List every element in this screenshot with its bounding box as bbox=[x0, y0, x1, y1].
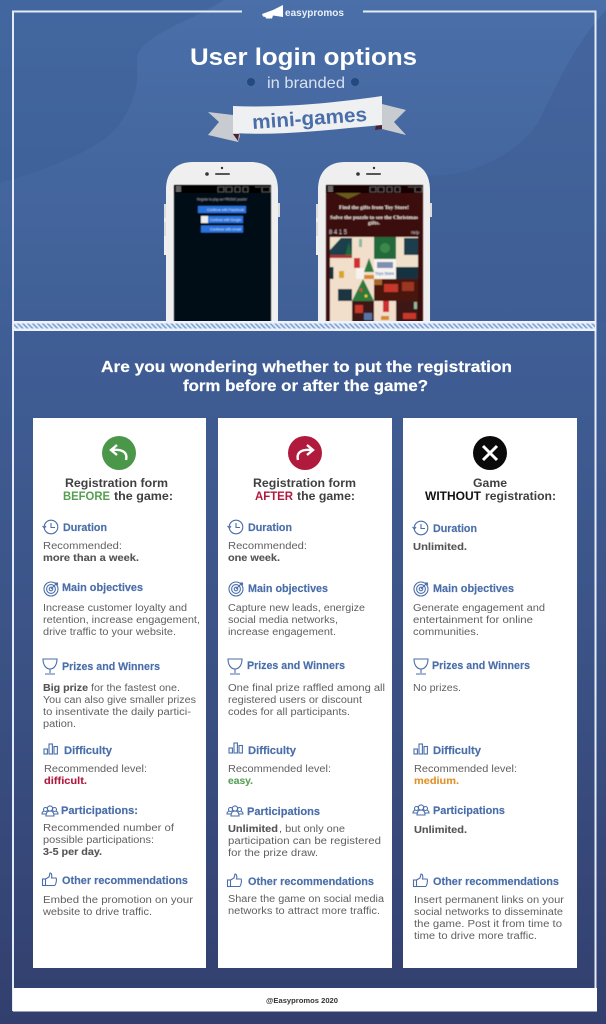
subtitle: in branded bbox=[247, 75, 359, 92]
prizes and winners bbox=[43, 659, 196, 730]
difficulty: easy. bbox=[228, 776, 253, 787]
other recommendations: time to drive more traffic. bbox=[414, 931, 537, 942]
main objectives: increase engagement. bbox=[228, 627, 336, 638]
participations: Recommended number of bbox=[43, 823, 174, 834]
question heading: form before or after the game? bbox=[183, 378, 428, 395]
footer credit: @Easypromos 2020 bbox=[266, 996, 338, 1005]
phone screen: Continue with Facebook bbox=[207, 208, 244, 212]
duration: Duration bbox=[433, 523, 477, 535]
prizes and winners: Big prize bbox=[43, 683, 88, 694]
logo wordmark: easypromos bbox=[285, 7, 344, 19]
participations: Participations bbox=[247, 806, 320, 818]
duration bbox=[42, 520, 139, 564]
difficulty bbox=[44, 744, 147, 787]
phone screen: Continue with Google bbox=[210, 218, 241, 222]
ribbon: mini-games bbox=[208, 96, 406, 142]
participations: Participations: bbox=[61, 805, 138, 817]
phone screen: gifts. bbox=[368, 220, 381, 226]
divider stripe bbox=[13, 321, 596, 331]
phone screen bbox=[174, 185, 271, 322]
duration: Duration bbox=[63, 522, 107, 534]
prizes and winners: registered users or discount bbox=[228, 695, 362, 706]
main objectives bbox=[228, 582, 365, 638]
column heading: AFTER bbox=[255, 489, 293, 503]
phone screen: Help bbox=[411, 230, 419, 235]
prizes and winners: codes for all participants. bbox=[228, 707, 350, 718]
prizes and winners: No prizes. bbox=[413, 683, 461, 694]
other recommendations: Other recommendations bbox=[62, 875, 188, 887]
participations: Unlimited bbox=[228, 824, 278, 835]
panel: game without registration bbox=[403, 418, 577, 968]
participations bbox=[413, 805, 505, 836]
duration: Recommended: bbox=[43, 541, 122, 552]
other recommendations: Insert permanent links on your bbox=[414, 895, 565, 906]
background shape: upper left bbox=[0, 0, 224, 183]
participations bbox=[42, 805, 174, 858]
phone: game screen bbox=[316, 162, 432, 322]
panel: registration after the game bbox=[218, 418, 392, 968]
participations bbox=[227, 806, 381, 859]
prizes and winners: Prizes and Winners bbox=[62, 661, 160, 673]
difficulty: Recommended level: bbox=[414, 764, 517, 775]
column heading: Game bbox=[473, 476, 507, 490]
logo: easypromos bbox=[262, 5, 344, 19]
participations: for the prize draw. bbox=[228, 848, 318, 859]
prizes and winners bbox=[228, 659, 385, 718]
duration bbox=[412, 521, 477, 553]
column heading: Registration form bbox=[65, 476, 168, 490]
difficulty: Recommended level: bbox=[44, 764, 147, 775]
prizes and winners: for the fastest one. bbox=[91, 683, 180, 694]
prizes and winners: You can also give smaller prizes bbox=[43, 695, 196, 706]
icon: megaphone bbox=[262, 5, 283, 18]
question heading bbox=[101, 359, 512, 395]
duration bbox=[228, 520, 307, 564]
main objectives: Capture new leads, energize bbox=[228, 603, 365, 614]
duration: one week. bbox=[228, 553, 280, 564]
participations: possible participations: bbox=[43, 835, 154, 846]
difficulty: Difficulty bbox=[248, 745, 297, 757]
prizes and winners: One final prize raffled among all bbox=[228, 683, 385, 694]
duration: more than a week. bbox=[43, 553, 139, 564]
main objectives: Main objectives bbox=[62, 582, 143, 594]
phone screen: Register to play our PROMO puzzle! bbox=[197, 198, 247, 202]
subtitle: in branded: in branded bbox=[267, 75, 345, 92]
duration: Unlimited. bbox=[413, 542, 467, 553]
difficulty: Difficulty bbox=[433, 745, 482, 757]
other recommendations: Embed the promotion on your bbox=[43, 895, 194, 906]
main objectives: Increase customer loyalty and bbox=[43, 603, 187, 614]
icon: back arrow bbox=[102, 436, 136, 470]
panel: registration before the game bbox=[33, 418, 206, 968]
main objectives: Main objectives bbox=[433, 583, 514, 595]
other recommendations: Other recommendations bbox=[433, 876, 559, 888]
column heading: BEFORE bbox=[63, 489, 110, 503]
column heading bbox=[63, 476, 173, 503]
duration: Recommended: bbox=[228, 541, 307, 552]
prizes and winners: pation. bbox=[43, 719, 76, 730]
main objectives: retention, increase engagement, bbox=[43, 615, 200, 626]
other recommendations bbox=[228, 874, 384, 917]
phone screen bbox=[326, 185, 423, 322]
icon: forward arrow bbox=[288, 436, 322, 470]
column heading: Registration form bbox=[253, 476, 356, 490]
other recommendations bbox=[414, 874, 565, 942]
phone screen: Solve the puzzle to see the Christmas bbox=[330, 215, 418, 221]
phone screen: Continue with email bbox=[210, 228, 241, 232]
question heading: Are you wondering whether to put the registration bbox=[101, 359, 512, 376]
column heading bbox=[253, 476, 356, 503]
difficulty: difficult. bbox=[44, 776, 87, 787]
prizes and winners: to insentivate the daily partici- bbox=[43, 707, 191, 718]
puzzle tiles: Toys Store bbox=[375, 271, 394, 276]
main objectives: entertainment for online bbox=[413, 615, 533, 626]
phone screen: Find the gifts from Toy Store! bbox=[339, 205, 409, 211]
participations: Participations bbox=[433, 805, 505, 817]
participations: Unlimited. bbox=[414, 825, 467, 836]
column heading bbox=[425, 476, 556, 503]
main objectives: social media networks, bbox=[228, 615, 338, 626]
main objectives: Generate engagement and bbox=[413, 603, 545, 614]
difficulty bbox=[414, 744, 517, 787]
other recommendations: website to drive traffic. bbox=[42, 907, 152, 918]
other recommendations: the game. Post it from time to bbox=[414, 919, 562, 930]
phone: registration screen bbox=[164, 162, 280, 322]
other recommendations: Other recommendations bbox=[248, 876, 374, 888]
participations: , but only one bbox=[279, 824, 345, 835]
main objectives: communities. bbox=[413, 627, 479, 638]
main objectives bbox=[43, 582, 200, 638]
difficulty: Difficulty bbox=[64, 745, 113, 757]
main objectives bbox=[413, 582, 545, 638]
background shape: right bbox=[425, 10, 606, 322]
column heading: registration: bbox=[485, 489, 556, 503]
phone screen: 8 4 1 5 bbox=[329, 230, 348, 236]
difficulty bbox=[228, 743, 331, 787]
column heading: the game: bbox=[114, 489, 173, 503]
other recommendations: Share the game on social media bbox=[228, 894, 384, 905]
difficulty: medium. bbox=[414, 776, 459, 787]
duration: Duration bbox=[248, 522, 292, 534]
column heading: WITHOUT bbox=[425, 489, 482, 503]
main objectives: Main objectives bbox=[248, 583, 328, 595]
ribbon: mini-games: mini-games bbox=[251, 104, 368, 134]
participations: participation can be registered bbox=[228, 836, 381, 847]
footer band bbox=[13, 988, 597, 1012]
main objectives: drive traffic to your website. bbox=[43, 627, 176, 638]
prizes and winners bbox=[413, 659, 530, 694]
prizes and winners: Prizes and Winners bbox=[432, 660, 530, 672]
prizes and winners: Prizes and Winners bbox=[247, 660, 345, 672]
title: User login options bbox=[190, 44, 417, 71]
other recommendations: social networks to disseminate bbox=[414, 907, 563, 918]
column heading: the game: bbox=[297, 489, 355, 503]
other recommendations: networks to attract more traffic. bbox=[228, 906, 380, 917]
participations: 3-5 per day. bbox=[43, 847, 102, 858]
icon: cross bbox=[473, 436, 507, 470]
difficulty: Recommended level: bbox=[228, 764, 331, 775]
other recommendations bbox=[42, 873, 194, 918]
